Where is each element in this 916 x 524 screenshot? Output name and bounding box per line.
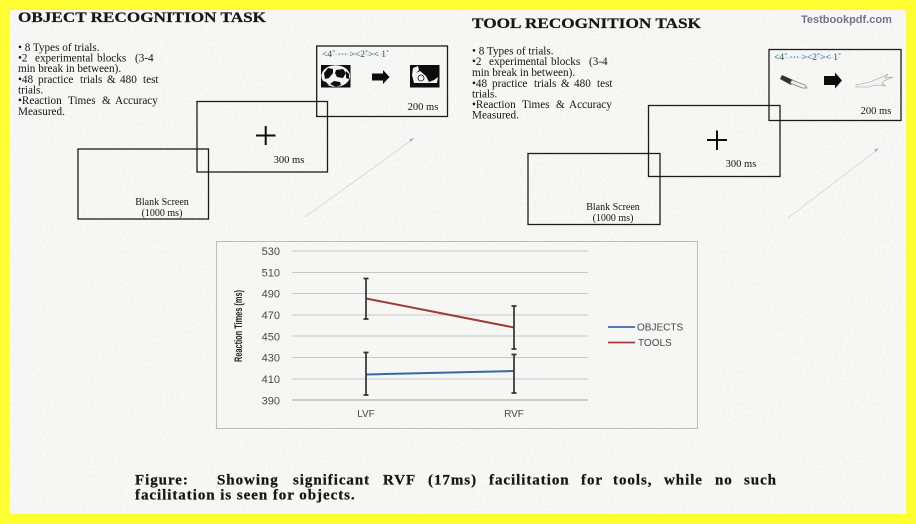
text block: tool task details bbox=[472, 46, 613, 122]
visual angle labels: <4˚ ··· ><2˚>< 1˚ bbox=[774, 52, 841, 63]
y axis labels: 410 bbox=[262, 374, 280, 386]
blank screen box: Blank Screen bbox=[586, 202, 640, 213]
figure caption: for bbox=[581, 472, 603, 488]
error bars bbox=[364, 278, 516, 395]
text block: object task details: test bbox=[143, 74, 159, 86]
icon: arrow bbox=[824, 72, 842, 88]
text block: object task details: 480 bbox=[120, 74, 137, 86]
text block: tool task details: experimental bbox=[489, 56, 547, 68]
arrow: timeline direction bbox=[788, 148, 879, 218]
series: tools bbox=[366, 298, 514, 328]
text block: object task details bbox=[18, 42, 159, 118]
text block: object task details: experimental bbox=[35, 52, 93, 64]
heading: object recognition task: OBJECT RECOGNITION TASK bbox=[18, 10, 267, 26]
text block: object task details: min break in between). bbox=[18, 63, 121, 75]
fixation box bbox=[197, 102, 328, 172]
blank screen box bbox=[78, 149, 208, 219]
y axis labels: 450 bbox=[262, 332, 280, 344]
text block: tool task details: •2 bbox=[472, 56, 482, 68]
panel: tool recognition task bbox=[472, 16, 901, 224]
fixation box bbox=[648, 106, 780, 176]
text block: tool task details: (3-4 bbox=[589, 56, 608, 68]
x axis labels: RVF bbox=[504, 409, 524, 420]
visual angle labels: <4˚ ··· ><2˚>< 1˚ bbox=[322, 49, 389, 60]
text block: tool task details: •Reaction bbox=[472, 99, 516, 111]
text block: tool task details: min break in between). bbox=[472, 67, 575, 79]
y axis labels: 490 bbox=[262, 288, 280, 300]
text block: tool task details: •48 bbox=[472, 78, 488, 90]
legend: TOOLS bbox=[638, 338, 672, 349]
figure caption: Figure: bbox=[135, 472, 189, 488]
fixation box: 300 ms bbox=[726, 159, 756, 170]
fixation box: 300 ms bbox=[274, 155, 304, 166]
text block: object task details: Accuracy bbox=[115, 95, 158, 107]
figure caption: RVF bbox=[383, 472, 416, 488]
text block: tool task details: Times bbox=[522, 99, 550, 111]
series: objects bbox=[366, 371, 514, 374]
blank screen box: Blank Screen bbox=[135, 197, 189, 208]
icon: abstract object bbox=[410, 65, 440, 88]
figure caption bbox=[135, 472, 777, 504]
stimulus box: 200 ms bbox=[861, 106, 891, 117]
text block: object task details: & bbox=[102, 95, 111, 107]
text block: tool task details: Measured. bbox=[472, 110, 519, 122]
figure caption: (17ms) bbox=[428, 472, 477, 488]
y axis labels: 390 bbox=[262, 396, 280, 408]
figure caption: facilitation is seen for objects. bbox=[135, 488, 356, 504]
figure caption: while bbox=[664, 472, 703, 488]
text block: object task details: practice bbox=[38, 74, 73, 86]
text block: tool task details: Accuracy bbox=[569, 99, 612, 111]
x axis labels bbox=[357, 409, 524, 420]
icon: airplane bbox=[856, 74, 893, 87]
legend bbox=[608, 322, 683, 349]
text block: tool task details: trials bbox=[534, 78, 556, 90]
text block: tool task details: blocks bbox=[551, 56, 580, 68]
y axis labels: 530 bbox=[262, 246, 280, 258]
y axis labels bbox=[262, 246, 280, 408]
arrow: timeline direction bbox=[305, 138, 414, 217]
text block: object task details: blocks bbox=[97, 52, 126, 64]
figure caption: such bbox=[744, 472, 777, 488]
icon: screwdriver bbox=[780, 75, 807, 88]
x axis labels: LVF bbox=[357, 409, 375, 420]
text block: object task details: trials bbox=[80, 74, 102, 86]
watermark: Testbookpdf.com bbox=[801, 14, 892, 26]
blank screen box: (1000 ms) bbox=[593, 213, 633, 224]
legend: OBJECTS bbox=[637, 322, 683, 334]
text block: object task details: • 8 Types of trials. bbox=[18, 42, 100, 54]
y axis title: Reaction Times (ms) bbox=[233, 290, 245, 362]
icon: soccer ball bbox=[321, 65, 350, 88]
text block: tool task details: & bbox=[561, 78, 570, 90]
text block: object task details: & bbox=[107, 74, 116, 86]
y axis labels: 510 bbox=[262, 268, 280, 280]
text block: object task details: (3-4 bbox=[135, 52, 154, 64]
y axis labels: 430 bbox=[262, 352, 280, 364]
figure caption: significant bbox=[293, 472, 370, 488]
figure caption: facilitation bbox=[489, 472, 570, 488]
text block: object task details: •48 bbox=[18, 74, 34, 86]
text block: object task details: •2 bbox=[18, 52, 28, 64]
stimulus box bbox=[317, 46, 448, 116]
panel: object recognition task bbox=[18, 10, 448, 219]
figure caption: no bbox=[715, 472, 733, 488]
text block: object task details: Measured. bbox=[18, 106, 65, 118]
icon: arrow bbox=[372, 70, 390, 84]
text block: tool task details: trials. bbox=[472, 88, 497, 100]
text block: tool task details: practice bbox=[492, 78, 527, 90]
y axis labels: 470 bbox=[262, 310, 280, 322]
blank screen box: (1000 ms) bbox=[142, 208, 182, 219]
gridlines bbox=[292, 251, 588, 400]
panel: line chart bbox=[216, 242, 698, 428]
text block: tool task details: 480 bbox=[574, 78, 591, 90]
figure caption: tools, bbox=[613, 472, 652, 488]
text block: tool task details: & bbox=[556, 99, 565, 111]
text block: tool task details: test bbox=[597, 78, 613, 90]
text block: object task details: trials. bbox=[18, 84, 43, 96]
blank screen box bbox=[528, 154, 660, 224]
figure caption: Showing bbox=[217, 472, 279, 488]
text block: object task details: •Reaction bbox=[18, 95, 62, 107]
text block: object task details: Times bbox=[68, 95, 96, 107]
stimulus box: 200 ms bbox=[408, 102, 438, 113]
stimulus box bbox=[769, 50, 901, 120]
text block: tool task details: • 8 Types of trials. bbox=[472, 46, 554, 58]
heading: tool recognition task: TOOL RECOGNITION TASK bbox=[472, 16, 702, 32]
